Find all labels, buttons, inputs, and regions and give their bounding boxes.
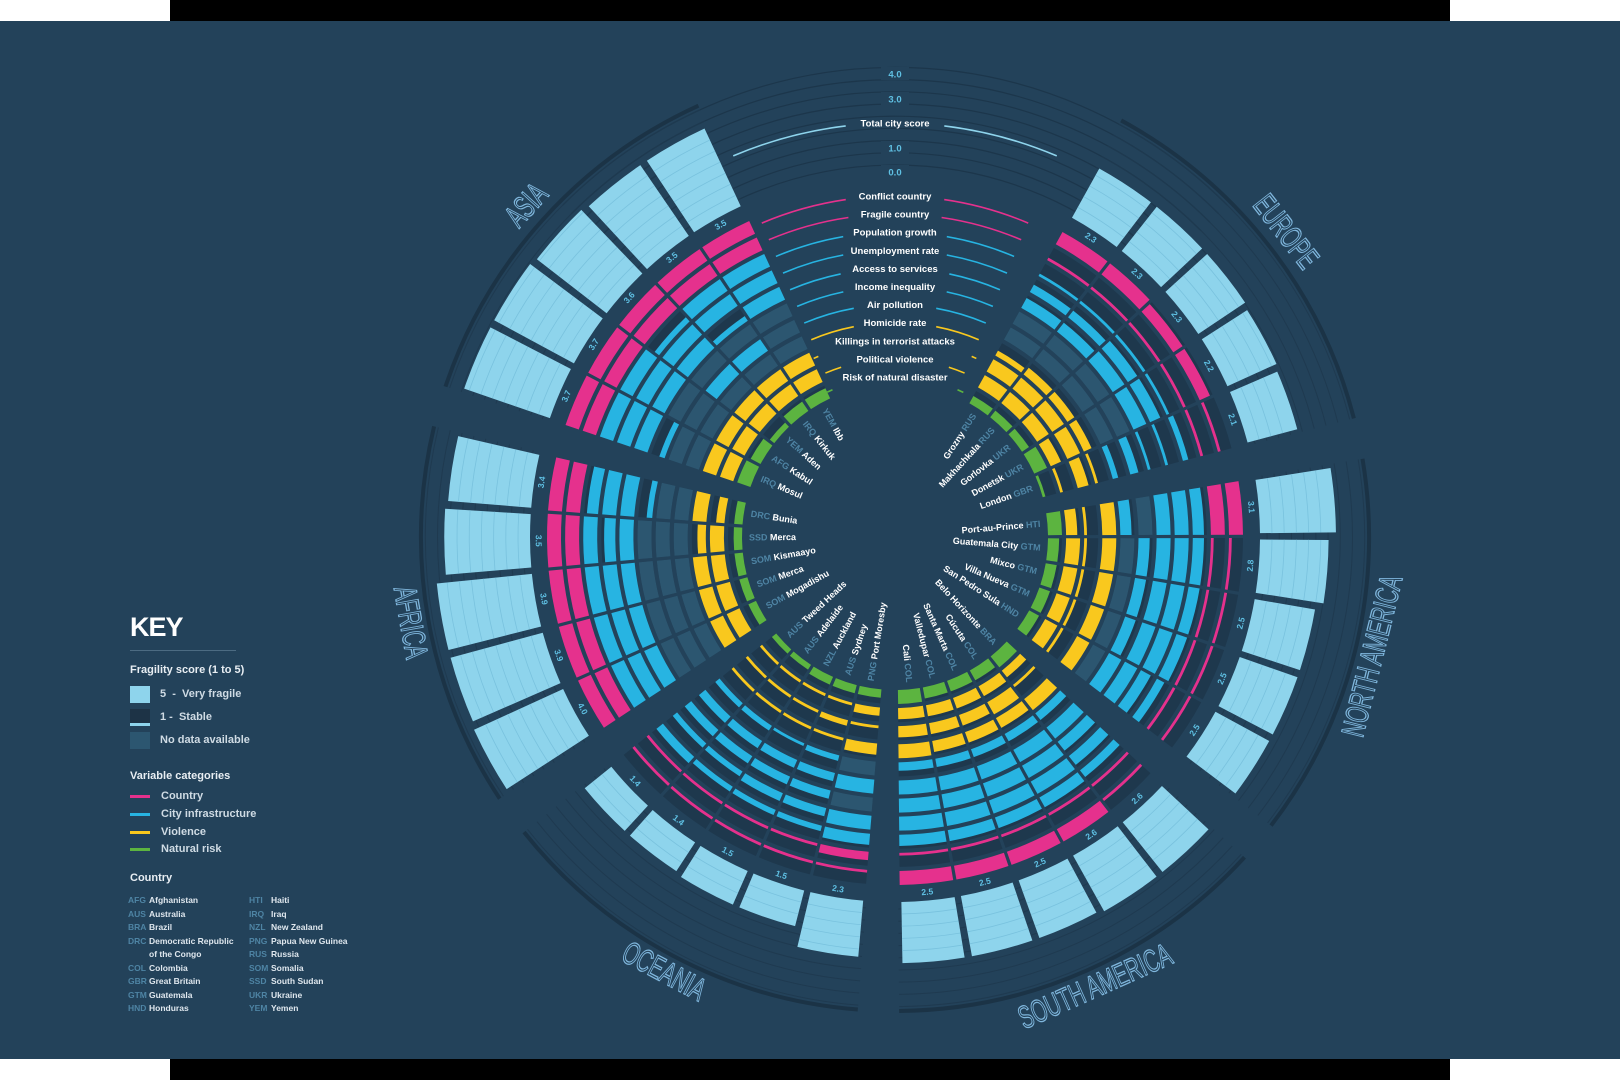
axis labels in top gap: 4.0 [888,70,902,80]
region: Asia: 3.5 [713,217,728,232]
country code list: IRQ [249,908,264,918]
region: Oceania: NZL Auckland [821,610,858,668]
country code list: Country [130,872,172,884]
region: Oceania: 1.4 [671,812,687,828]
region: Africa: 3.4 [536,475,547,489]
region: Africa: 3.5 [534,535,544,547]
region: Europe [937,120,1354,511]
region: Asia [445,106,846,501]
country code list [128,872,348,1013]
axis labels in top gap: Killings in terrorist attacks [835,336,955,347]
fragility score legend: 1 - Stable [160,711,212,723]
country code list: of the Congo [149,949,201,959]
region: North America: Port-au-Prince HTI [961,519,1041,536]
axis labels in top gap [563,67,1227,392]
region: Europe: Gorlovka UKR [959,442,1013,488]
fragility score legend: No data available [160,734,250,746]
country code list: SSD [249,976,266,986]
country code list: GBR [128,976,147,986]
country code list: New Zealand [271,922,323,932]
country code list: South Sudan [271,976,323,986]
region: North America: 2.8 [1245,559,1256,572]
region: North America: 3.1 [1246,501,1257,514]
region: Asia: IRQ Mosul [759,474,804,501]
axis labels in top gap: Political violence [856,354,934,365]
region: South America: 2.5 [978,875,992,888]
region: Europe: 2.3 [1129,266,1145,282]
region: Africa: SSD Merca [749,532,797,543]
region: Europe: 2.1 [1226,412,1240,427]
region: Europe: Grozny RUS [941,412,979,461]
country code list: Yemen [271,1003,298,1013]
region: South America: 2.5 [921,886,934,897]
region: South America: 2.6 [1129,791,1145,806]
region: Asia: 3.7 [559,388,573,403]
country code list: AUS [128,908,146,918]
country code list: Ukraine [271,990,302,1000]
region: Europe: London GBR [979,484,1035,511]
variable categories legend: Violence [161,826,206,838]
region: Asia: YEM Aden [784,435,823,472]
region: South America [898,578,1244,1036]
region: South America: Cali COL [900,644,914,683]
variable categories legend [130,770,256,855]
country code list: Australia [149,908,185,918]
axis labels in top gap: Total city score [860,118,930,130]
variable categories legend: Country [161,790,203,802]
country code list: Russia [271,949,299,959]
country code list: BRA [128,922,146,932]
axis labels in top gap: 0.0 [888,168,902,178]
variable categories legend: Variable categories [130,770,230,782]
region: South America: 2.6 [1083,827,1099,842]
country code list: Afghanistan [149,895,198,905]
region: South America: Valledupar COL [911,612,937,680]
axis labels in top gap: Unemployment rate [851,246,939,257]
region: South America: Santa Marta COL [921,602,960,673]
region: Asia: 3.5 [664,250,680,265]
region: Europe: Donetsk UKR [970,462,1026,498]
country code list: Great Britain [149,976,200,986]
region: Oceania: AUS Sydney [843,623,870,677]
region: North America: Mixco GTM [989,555,1038,577]
region: North America: 2.5 [1215,671,1229,686]
country code list: YEM [249,1003,267,1013]
region: Europe: 2.2 [1202,358,1216,374]
country code list: Haiti [271,895,289,905]
region: Europe: EUROPE [1246,187,1326,276]
country code list: Democratic Republic [149,936,234,946]
region: Oceania: AUS Adelaide [802,603,845,656]
region: Europe: Makhachkala RUS [937,426,997,490]
region: Africa: SOM Merca [755,564,806,590]
country code list: Brazil [149,922,172,932]
region: North America [941,459,1410,826]
axis labels in top gap: 3.0 [888,94,902,106]
country code list: SOM [249,962,268,972]
region: Oceania: OCEANIA [616,934,712,1008]
region: South America: SOUTH AMERICA [1013,936,1177,1036]
country code list: DRC [128,936,146,946]
region: North America: Guatemala City GTM [952,536,1041,553]
region: Africa: DRC Bunia [750,509,799,526]
region: Europe: 2.3 [1083,230,1099,245]
country code list: AFG [128,895,146,905]
region: Oceania: AUS Tweed Heads [785,579,849,640]
black bar top [170,0,1450,21]
variable categories legend: City infrastructure [161,808,256,820]
region: South America: Cúcuta COL [943,612,980,662]
country code list: Iraq [271,908,287,918]
region: Africa: AFRICA [387,583,435,661]
region: North America: 2.5 [1187,722,1202,738]
country code list: HTI [249,895,263,905]
region: Oceania: 1.5 [774,868,789,881]
region: North America: 2.5 [1234,616,1247,630]
country code list: RUS [249,949,267,959]
axis labels in top gap: Homicide rate [864,318,926,329]
region: Asia: IRQ Kirkuk [800,419,838,463]
region: Asia: 3.7 [586,336,601,352]
country code list: GTM [128,990,147,1000]
region: Oceania: 1.4 [628,773,643,789]
fragility score legend: Fragility score (1 to 5) [130,664,244,676]
region: Asia: AFG Kabul [770,454,814,487]
fragility score legend: 5 - Very fragile [160,688,241,700]
country code list: HND [128,1003,146,1013]
region: Africa: 3.9 [538,592,550,606]
country code list: Colombia [149,962,188,972]
country code list: PNG [249,936,267,946]
country code list: Guatemala [149,990,192,1000]
region: Africa: SOM Mogadishu [764,568,831,611]
region: South America: Belo Horizonte BRA [933,578,999,647]
region: Africa: SOM Kismaayo [750,545,817,567]
region: Oceania [524,579,889,1010]
region: Europe: 2.3 [1169,309,1185,325]
country code list: Somalia [271,962,304,972]
country code list: UKR [249,990,267,1000]
region: South America: 2.5 [1032,855,1048,869]
axis labels in top gap: Access to services [852,264,938,275]
country code list: Honduras [149,1003,189,1013]
axis labels in top gap: Conflict country [859,192,932,202]
region: North America: Villa Nueva GTM [963,562,1031,599]
region: North America: NORTH AMERICA [1335,571,1410,740]
region: Oceania: PNG Port Moresby [866,602,889,682]
region: Africa: 3.9 [552,648,566,663]
axis labels in top gap: Income inequality [855,282,936,293]
axis labels in top gap: Population growth [853,228,937,239]
fragility score legend [130,664,250,749]
region: Oceania: 1.5 [720,844,736,859]
axis labels in top gap: Fragile country [861,210,930,221]
key heading: KEY [130,612,183,642]
axis labels in top gap: Air pollution [867,300,923,311]
country code list: Papua New Guinea [271,936,348,946]
region: Asia: ASIA [498,176,555,234]
region: North America: San Pedro Sula HND [941,564,1021,620]
variable categories legend: Natural risk [161,843,222,855]
region: Asia: 3.6 [621,290,637,305]
black bar bottom [170,1059,1450,1080]
region: Asia: YEM Ibb [820,407,846,443]
axis labels in top gap: Risk of natural disaster [842,372,948,384]
legend: key [128,612,348,1013]
country code list: COL [128,962,146,972]
region: Africa [387,426,831,799]
region: Africa: 4.0 [576,701,590,716]
region: Oceania: 2.3 [831,883,845,895]
axis labels in top gap: 1.0 [888,144,902,154]
country code list: NZL [249,922,266,932]
